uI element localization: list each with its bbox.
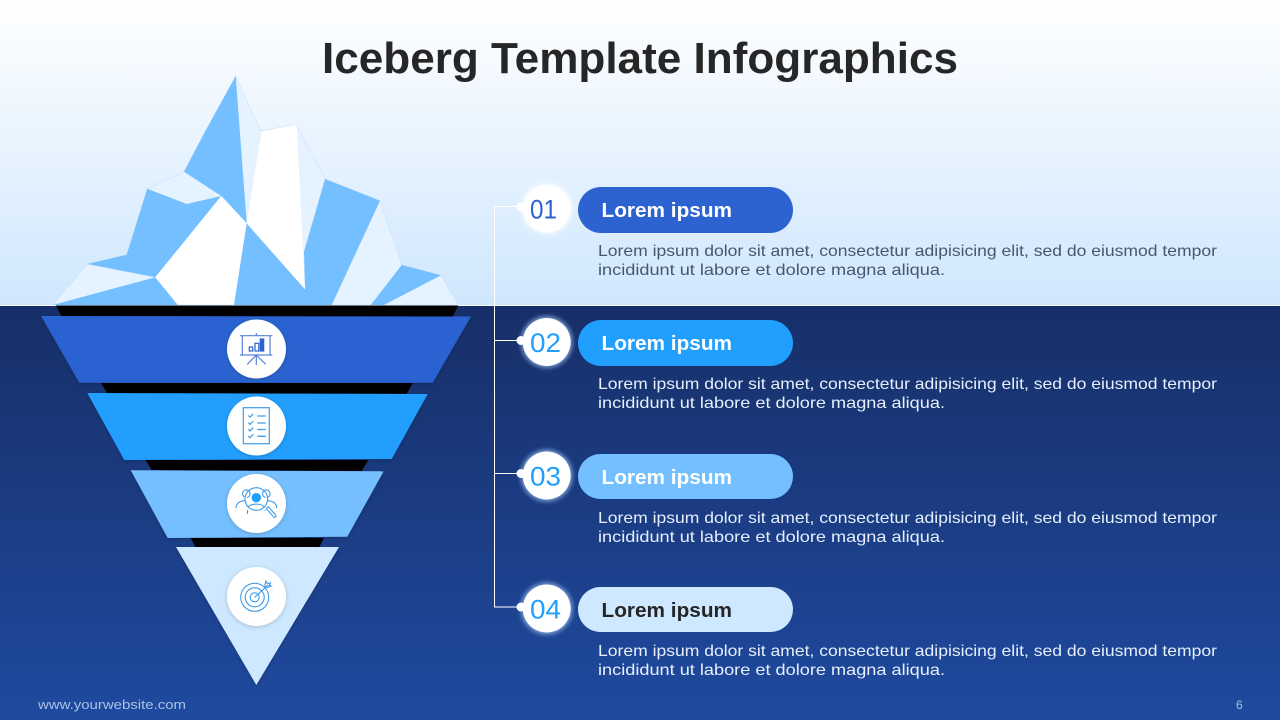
description 03: Lorem ipsum dolor sit amet, consectetur adipisicing elit, sed do eiusmod tempor <box>598 510 1218 527</box>
heading 03: Lorem ipsum <box>602 466 732 489</box>
iceberg above water <box>53 76 458 305</box>
number 03: 03 <box>530 462 561 492</box>
iceberg band 1 with icon <box>41 306 471 383</box>
pill 04 <box>578 587 793 632</box>
heading 01: Lorem ipsum <box>602 199 732 222</box>
item 04 <box>516 582 1218 679</box>
description 03 <box>598 510 1218 546</box>
number 04: 04 <box>530 594 561 624</box>
pill 03 <box>578 454 793 499</box>
iceberg tip triangle with icon <box>176 538 339 685</box>
connector lines <box>494 206 522 607</box>
number 01: 01 <box>530 194 557 224</box>
pill 02 <box>578 320 793 366</box>
description 01: Lorem ipsum dolor sit amet, consectetur adipisicing elit, sed do eiusmod tempor <box>598 243 1218 260</box>
page number: 6 <box>1236 698 1243 712</box>
description 01 <box>598 243 1218 279</box>
heading 04: Lorem ipsum <box>602 599 732 622</box>
title: Iceberg Template Infographics <box>322 34 958 83</box>
item 01 <box>516 183 1218 279</box>
description 03: incididunt ut labore et dolore magna aliqua. <box>598 529 945 546</box>
heading 02: Lorem ipsum <box>602 332 732 355</box>
footer website: www.yourwebsite.com <box>37 697 186 712</box>
item 03 <box>516 450 1218 546</box>
background: sky <box>0 0 1280 305</box>
background: sea <box>0 306 1280 720</box>
item 02 <box>516 316 1218 412</box>
icon: checklist <box>243 408 269 444</box>
description 04 <box>598 643 1218 679</box>
pill 01 <box>578 187 793 233</box>
description 04: incididunt ut labore et dolore magna aliqua. <box>598 662 945 679</box>
icon: target <box>241 581 271 611</box>
description 02: Lorem ipsum dolor sit amet, consectetur adipisicing elit, sed do eiusmod tempor <box>598 376 1218 393</box>
iceberg band 3 with icon <box>131 460 384 538</box>
icon: people search <box>236 488 277 517</box>
description 02: incididunt ut labore et dolore magna aliqua. <box>598 395 945 412</box>
iceberg band 2 with icon <box>87 383 428 460</box>
description 04: Lorem ipsum dolor sit amet, consectetur adipisicing elit, sed do eiusmod tempor <box>598 643 1218 660</box>
description 02 <box>598 376 1218 412</box>
description 01: incididunt ut labore et dolore magna aliqua. <box>598 262 945 279</box>
icon: presentation board <box>240 333 272 365</box>
number 02: 02 <box>530 328 561 358</box>
